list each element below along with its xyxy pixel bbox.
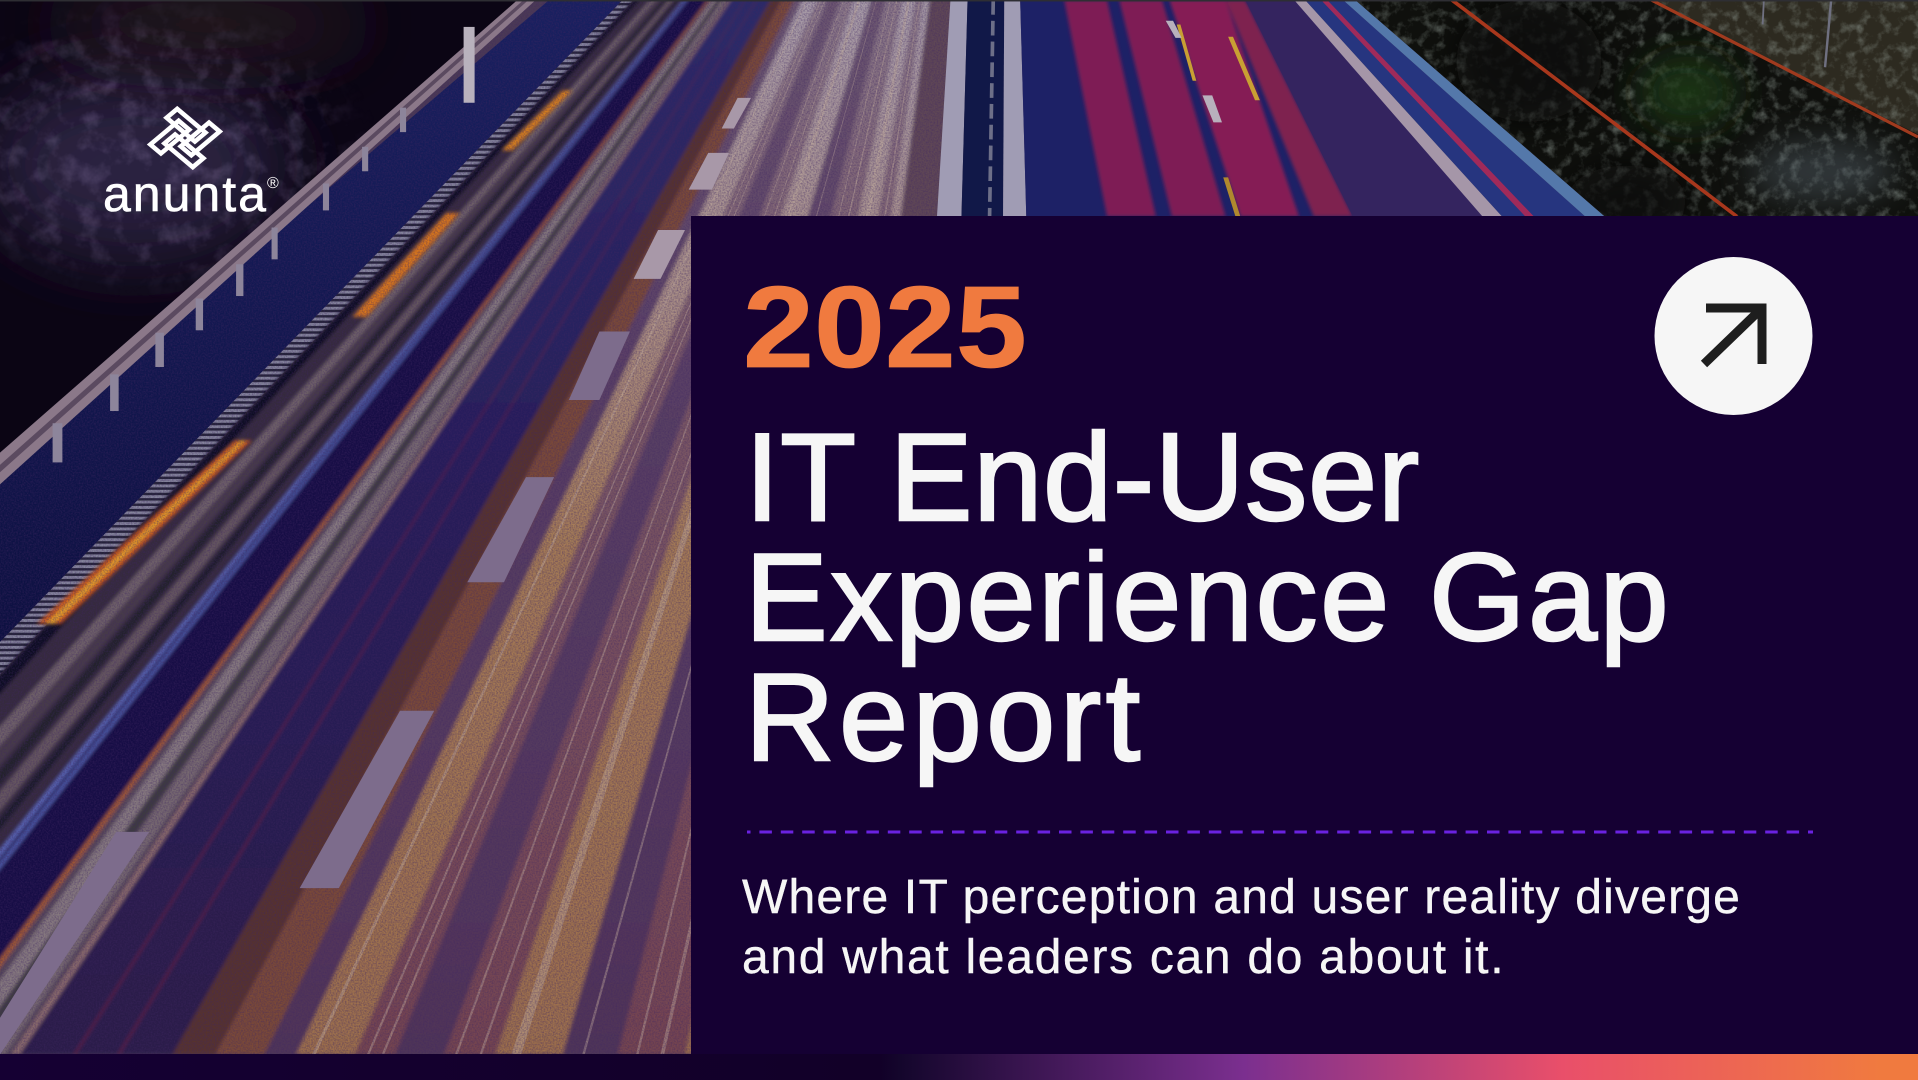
- subtitle: and what leaders can do about it.: [742, 931, 1505, 984]
- roadside gravel: [0, 0, 979, 1054]
- dashed divider: [747, 830, 1813, 834]
- left guard rail: [0, 0, 536, 484]
- main title: Report: [745, 649, 1145, 787]
- top hairline: [0, 0, 1918, 1]
- orange tail-light streaks: [37, 91, 572, 624]
- grain: [0, 0, 979, 1054]
- subtitle: Where IT perception and user reality diverge: [742, 871, 1741, 924]
- registered mark: ®: [267, 175, 279, 192]
- main title: IT End-User: [745, 409, 1420, 547]
- rumble strip: [0, 0, 979, 1054]
- year heading: 2025: [743, 262, 1027, 392]
- white lane dashes: [0, 98, 751, 1054]
- central median: [937, 0, 1026, 217]
- panel: title block: [691, 216, 1918, 1054]
- fine light streaks: [312, 0, 979, 1054]
- icon: endless knot: [146, 106, 224, 170]
- bottom gradient bar: [0, 1054, 1918, 1080]
- logo: anunta: [103, 106, 279, 222]
- right vegetation: [1357, 2, 1918, 216]
- left vegetation: [0, 0, 538, 477]
- main title: Experience Gap: [745, 529, 1671, 667]
- logo wordmark: anunta: [103, 166, 268, 222]
- light trails: left carriageway: [0, 0, 979, 1054]
- icon: arrow in circle: [1654, 257, 1812, 415]
- right carriageway with red trails: [1020, 0, 1605, 217]
- subtitle: [742, 871, 1741, 984]
- main title: [745, 409, 1671, 788]
